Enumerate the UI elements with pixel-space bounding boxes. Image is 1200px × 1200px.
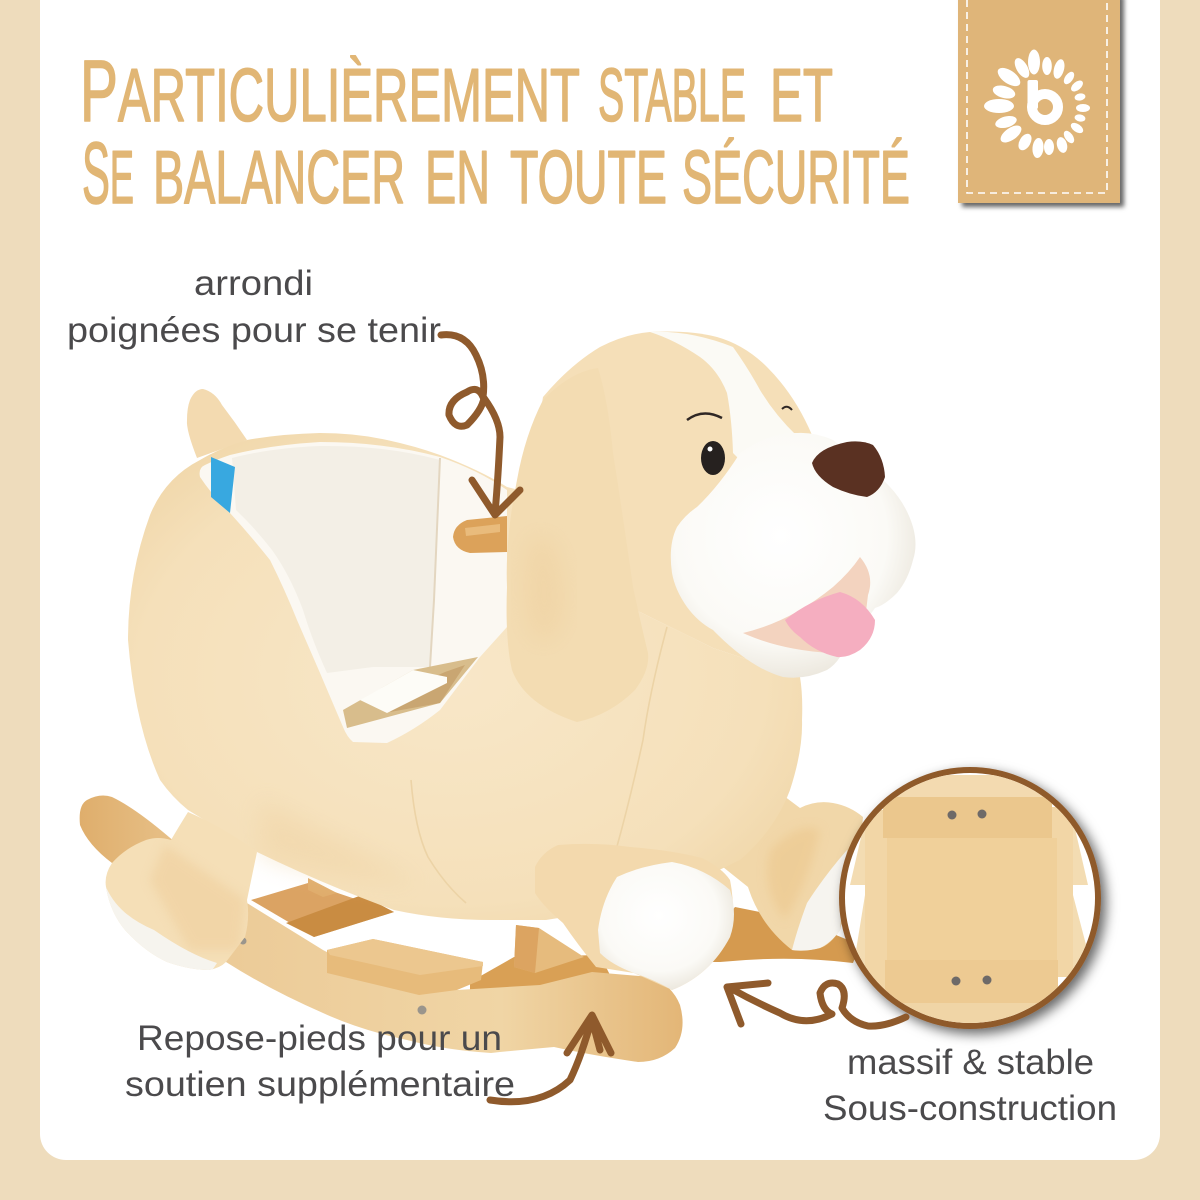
footrest: [327, 939, 483, 995]
label: footrest: [125, 1019, 515, 1104]
title: EN: [425, 135, 490, 219]
label: handles: [67, 264, 441, 350]
title: ET: [770, 53, 833, 137]
label: base: massif & stable: [847, 1043, 1094, 1082]
plush dog: [96, 332, 916, 990]
tail: [187, 389, 247, 458]
title: BALANCER: [153, 135, 405, 219]
eyebrow: [687, 413, 722, 420]
title: [80, 43, 910, 222]
label: base: Sous-construction: [823, 1089, 1117, 1128]
support post: [514, 925, 584, 973]
head: [530, 332, 830, 677]
nose: [812, 441, 885, 497]
wooden handle: [453, 516, 507, 553]
title: PARTICULIÈREMENT: [80, 43, 580, 140]
label: footrest: soutien supplémentaire: [125, 1065, 515, 1104]
inset: wooden underside: [839, 767, 1101, 1030]
front foot: [535, 844, 733, 990]
far front foot: [723, 793, 863, 951]
crossbar: [251, 883, 394, 937]
shading on body: [260, 800, 420, 885]
title: SÉCURITÉ: [682, 135, 910, 219]
white blaze: [650, 332, 797, 458]
label: handles: poignées pour se tenir: [67, 311, 441, 350]
far rocker: [690, 907, 860, 963]
brand tag with logo: [958, 0, 1120, 203]
seat back panel: [232, 446, 440, 673]
muzzle: [671, 433, 916, 678]
label: handles: arrondi: [194, 264, 313, 303]
label tag: [211, 457, 235, 513]
body: [128, 433, 802, 920]
eye: [701, 441, 725, 475]
buckle: [360, 670, 447, 713]
seat: [200, 442, 507, 743]
icon: flower logo: [984, 50, 1090, 158]
title: STABLE: [598, 53, 746, 137]
safety belt: [343, 657, 478, 728]
inner wood: [470, 955, 610, 992]
label: footrest: Repose-pieds pour un: [137, 1019, 502, 1058]
mouth inside: [743, 557, 870, 653]
title: SE: [82, 125, 134, 222]
ear: [507, 368, 648, 722]
arrow: base: [727, 983, 906, 1026]
tongue: [785, 592, 875, 657]
title: TOUTE: [510, 135, 667, 219]
label: base: [823, 1043, 1117, 1128]
back foot: [106, 812, 257, 970]
rocking base: [80, 796, 860, 1062]
arrow: footrest: [490, 1015, 611, 1102]
arrow: handles: [441, 335, 520, 515]
near rocker: [80, 796, 683, 1062]
rocker screws: [240, 938, 426, 1014]
seams: [411, 627, 667, 903]
